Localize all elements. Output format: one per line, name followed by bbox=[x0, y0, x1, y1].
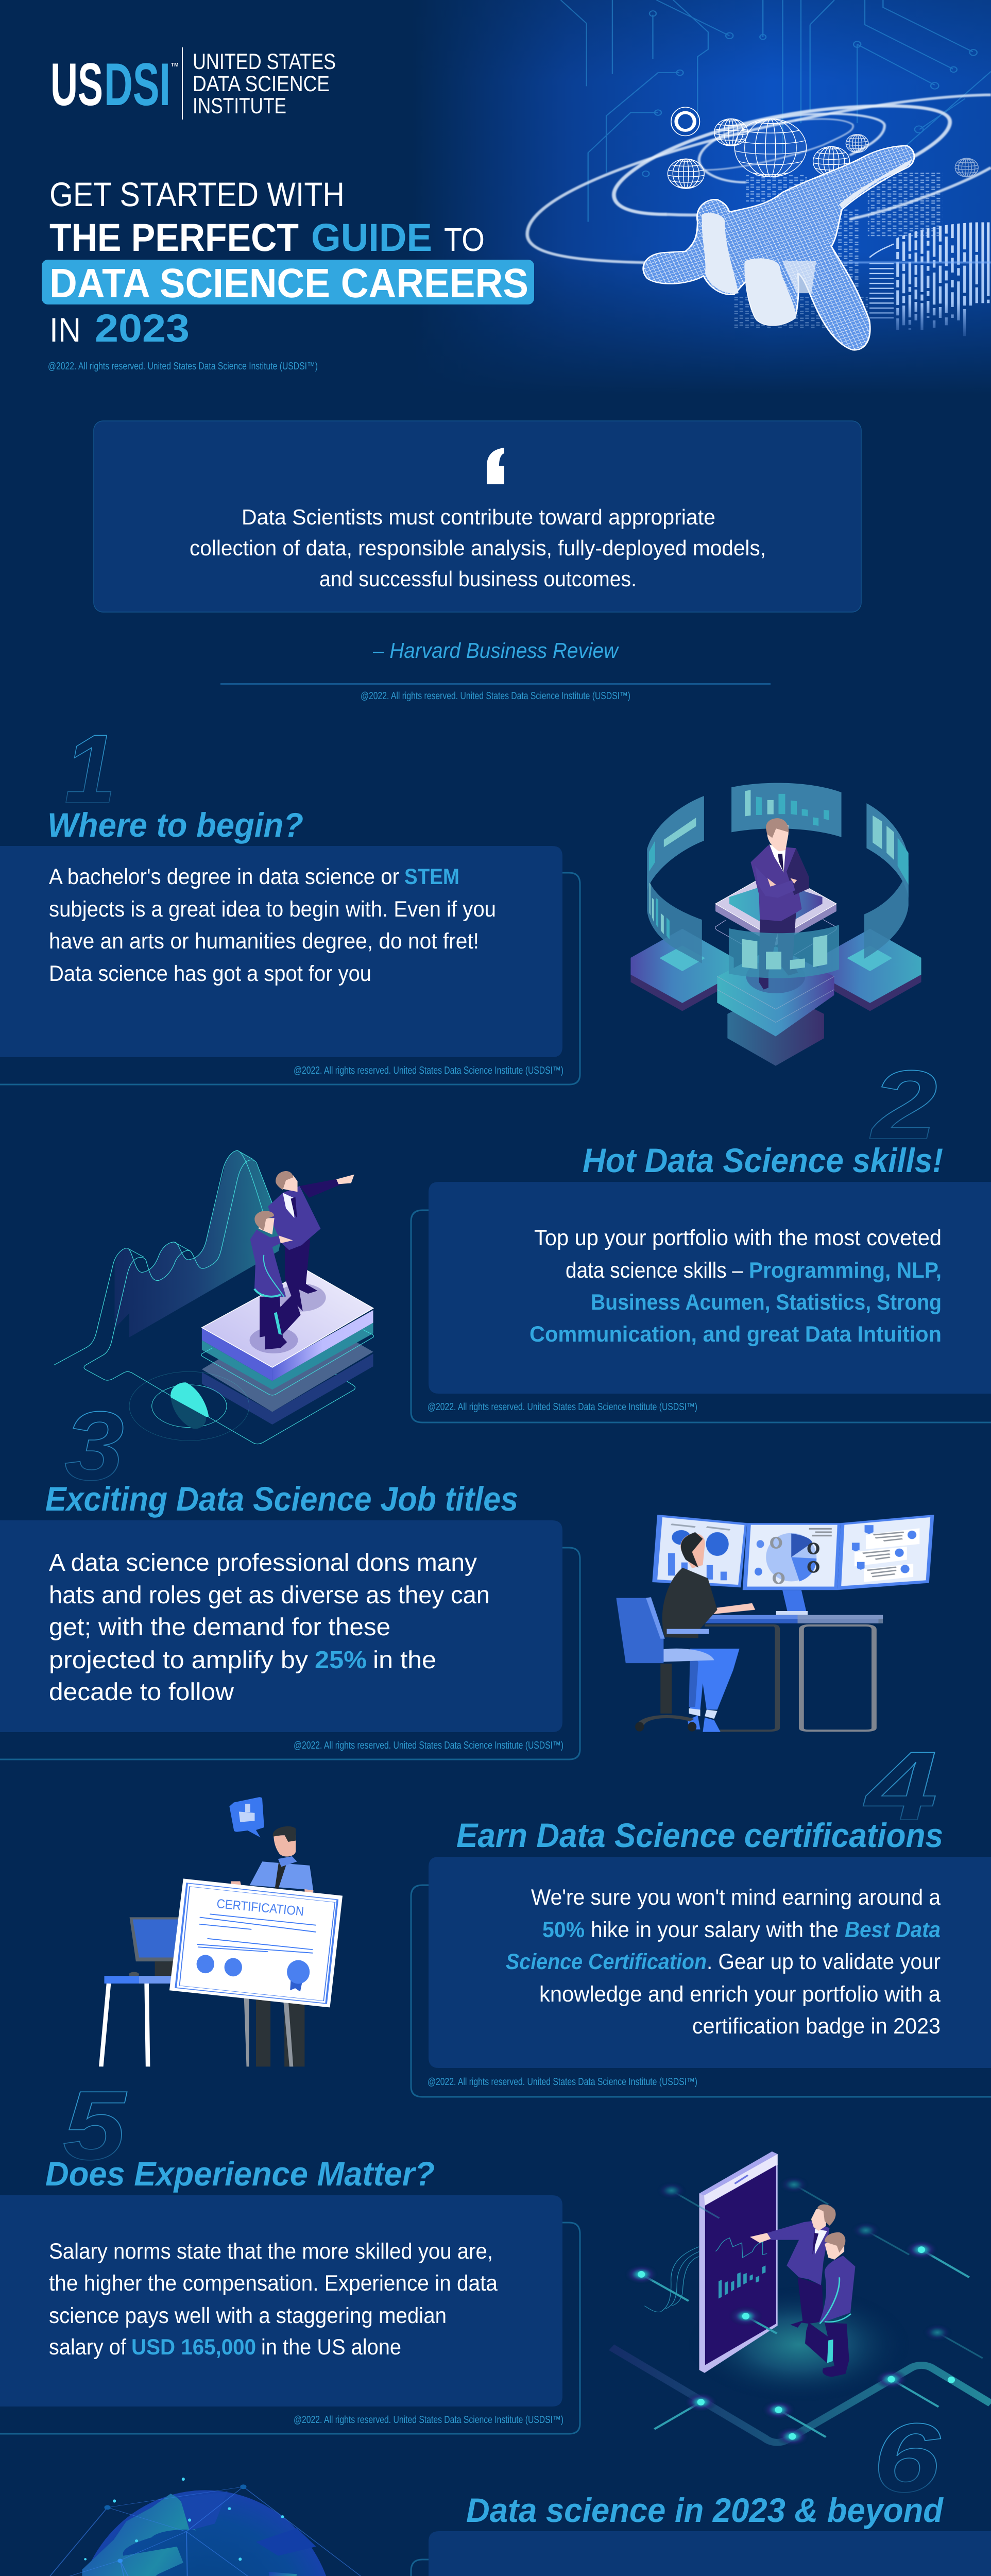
panel: certifications bbox=[411, 1857, 991, 2097]
monitor stand and desk bbox=[698, 1590, 883, 1623]
front man bbox=[250, 1211, 301, 1349]
icon: quote mark bbox=[487, 448, 504, 484]
network lines bbox=[43, 2487, 368, 2576]
radar disc bbox=[129, 1371, 249, 1440]
wire spheres bbox=[668, 119, 978, 189]
title: TO bbox=[444, 221, 485, 258]
logo wordmark: DATA SCIENCE bbox=[193, 72, 330, 96]
ring panel bars bbox=[649, 790, 909, 939]
body text: Top up your portfolio with the most coveted bbox=[534, 1226, 942, 1250]
body text: Communication, and great Data Intuition bbox=[529, 1322, 942, 1347]
illustration: man with certificate bbox=[101, 1797, 343, 2066]
title: GET STARTED WITH bbox=[49, 175, 345, 213]
tablet bbox=[699, 2151, 778, 2373]
copyright header: @2022. All rights reserved. United States Data Science Institute (USDSI™) bbox=[48, 361, 318, 372]
body text bbox=[49, 865, 496, 986]
body text: certification badge in 2023 bbox=[692, 2014, 941, 2039]
panel: quote bbox=[94, 421, 861, 612]
panel: beyond bbox=[411, 2531, 991, 2576]
body text: STEM bbox=[404, 865, 459, 889]
thumbs-up bubble bbox=[229, 1797, 264, 1837]
copyright: @2022. All rights reserved. United States Data Science Institute (USDSI™) bbox=[428, 2076, 697, 2088]
orbit rings bbox=[527, 95, 991, 263]
logo wordmark bbox=[193, 49, 336, 118]
title highlight bar bbox=[42, 260, 534, 304]
title: GUIDE bbox=[311, 216, 432, 260]
continents bbox=[82, 2492, 332, 2576]
quote text: Data Scientists must contribute toward appropriate bbox=[242, 505, 715, 529]
quote text: collection of data, responsible analysis, fully-deployed models, bbox=[190, 536, 766, 560]
body text: hats and roles get as diverse as they can bbox=[49, 1582, 490, 1609]
body text: in the US alone bbox=[261, 2335, 401, 2360]
body text: Data science has got a spot for you bbox=[49, 961, 371, 986]
number 4: 4 bbox=[863, 1732, 937, 1841]
side platforms bbox=[630, 929, 921, 1011]
number 2: 2 bbox=[869, 1050, 937, 1160]
quote text: and successful business outcomes. bbox=[319, 567, 637, 591]
number 6: 6 bbox=[873, 2403, 941, 2513]
men bbox=[750, 2205, 855, 2377]
platform layers bbox=[201, 1270, 373, 1425]
title: THE PERFECT bbox=[49, 216, 299, 260]
body text: knowledge and enrich your portfolio with a bbox=[539, 1982, 941, 2007]
certificate heading: CERTIFICATION bbox=[216, 1896, 304, 1919]
copyright: @2022. All rights reserved. United States Data Science Institute (USDSI™) bbox=[428, 1401, 697, 1413]
body text: have an arts or humanities degree, do not fret! bbox=[49, 929, 479, 954]
copyright quote: @2022. All rights reserved. United States Data Science Institute (USDSI™) bbox=[361, 690, 630, 702]
logo wordmark: UNITED STATES bbox=[193, 49, 336, 74]
wireframe hand bbox=[643, 146, 914, 350]
heading: hot skills: Hot Data Science skills! bbox=[583, 1141, 943, 1179]
body text: decade to follow bbox=[49, 1679, 234, 1706]
illustration: man on data platforms bbox=[630, 783, 921, 1066]
network nodes bbox=[40, 2484, 371, 2576]
foot shadows bbox=[250, 1283, 326, 1353]
body text: . Gear up to validate your bbox=[707, 1950, 941, 1974]
body text: data science skills – bbox=[566, 1258, 743, 1283]
panel: experience bbox=[0, 2195, 580, 2434]
body text: We're sure you won't mind earning around a bbox=[531, 1885, 941, 1910]
heading: certifications: Earn Data Science certifications bbox=[456, 1816, 943, 1854]
logo divider bbox=[182, 47, 183, 120]
body text: science pays well with a staggering median bbox=[49, 2303, 447, 2328]
body text: Science Certification bbox=[506, 1950, 707, 1974]
circuit traces bbox=[561, 0, 991, 222]
copyright: @2022. All rights reserved. United States Data Science Institute (USDSI™) bbox=[294, 2414, 563, 2426]
data building blocks bbox=[734, 173, 943, 328]
body text: hike in your salary with the bbox=[591, 1918, 839, 1942]
ring panels back bbox=[647, 783, 909, 963]
quote text bbox=[190, 505, 766, 591]
front panel bbox=[729, 925, 839, 978]
illustration: globe with network bbox=[40, 2478, 371, 2576]
title bbox=[42, 175, 534, 350]
monitor left content bbox=[668, 1524, 730, 1580]
quote attribution: – Harvard Business Review bbox=[372, 638, 619, 663]
stand platform bbox=[715, 870, 836, 955]
body text: Business Acumen, Statistics, Strong bbox=[591, 1290, 942, 1315]
heading: where to begin: Where to begin? bbox=[47, 806, 303, 844]
desk with monitor bbox=[101, 1917, 183, 2066]
body text: in the bbox=[373, 1647, 436, 1674]
body text: salary of bbox=[49, 2335, 127, 2360]
logo mark: USDSI: TM bbox=[171, 62, 178, 68]
title: IN bbox=[49, 311, 81, 349]
circular data tower bbox=[869, 222, 988, 337]
body text bbox=[506, 1885, 941, 2039]
body text bbox=[529, 1226, 942, 1347]
logo mark: USDSI bbox=[50, 50, 178, 118]
panel: job titles bbox=[0, 1520, 580, 1759]
body text: 50% bbox=[542, 1918, 585, 1942]
logo bbox=[50, 47, 336, 120]
globe bbox=[76, 2490, 335, 2576]
panel: hot skills bbox=[411, 1182, 991, 1422]
body text bbox=[49, 1549, 490, 1706]
number 1: 1 bbox=[64, 715, 116, 824]
analyst bbox=[662, 1532, 755, 1732]
wave lines bbox=[54, 1150, 355, 1444]
monitor right content bbox=[852, 1525, 919, 1582]
body text: Salary norms state that the more skilled you are, bbox=[49, 2239, 493, 2264]
logo wordmark: INSTITUTE bbox=[193, 94, 286, 118]
logo mark: USDSI: DSI bbox=[104, 50, 170, 118]
logo mark: USDSI: US bbox=[50, 50, 103, 118]
title: 2023 bbox=[95, 307, 190, 350]
wave rings behind tablet bbox=[644, 2247, 699, 2312]
number 3: 3 bbox=[64, 1392, 124, 1501]
heading: beyond: Data science in 2023 & beyond bbox=[466, 2491, 944, 2529]
star dots bbox=[66, 2478, 360, 2576]
back man bbox=[268, 1171, 354, 1311]
copyright: @2022. All rights reserved. United States Data Science Institute (USDSI™) bbox=[294, 1740, 563, 1751]
monitors bbox=[652, 1515, 934, 1590]
body text: get; with the demand for these bbox=[49, 1614, 390, 1641]
panel: where to begin bbox=[0, 846, 580, 1084]
monitor center content bbox=[755, 1529, 832, 1583]
legs bbox=[244, 1995, 304, 2066]
body text: projected to amplify by bbox=[49, 1647, 308, 1674]
body text: A bachelor's degree in data science or bbox=[49, 865, 399, 889]
desk legs bbox=[705, 1625, 874, 1731]
man bbox=[750, 818, 809, 990]
body text: A data science professional dons many bbox=[49, 1549, 477, 1577]
wave fill bbox=[114, 1150, 283, 1337]
target ring bbox=[671, 107, 699, 136]
illustration: two men at giant tablet bbox=[611, 2151, 991, 2446]
illustration: two men on platform with wave chart bbox=[54, 1150, 373, 1444]
center stack bbox=[717, 946, 834, 1066]
body text: USD 165,000 bbox=[131, 2335, 256, 2360]
heading: job titles: Exciting Data Science Job titles bbox=[45, 1480, 518, 1518]
number 5: 5 bbox=[63, 2071, 127, 2180]
body text: subjects is a great idea to begin with. Even if you bbox=[49, 897, 496, 922]
body text: Programming, NLP, bbox=[749, 1258, 942, 1283]
body text bbox=[49, 2239, 498, 2360]
illustration: analyst at three monitors bbox=[616, 1515, 934, 1732]
circuit path bbox=[611, 2347, 991, 2443]
certificate bbox=[169, 1878, 343, 2007]
man bbox=[231, 1826, 314, 1894]
chair bbox=[616, 1597, 714, 1732]
body text: Best Data bbox=[845, 1918, 941, 1942]
copyright: @2022. All rights reserved. United States Data Science Institute (USDSI™) bbox=[294, 1065, 563, 1076]
floor glow bbox=[689, 2287, 909, 2401]
body text: the higher the compensation. Experience in data bbox=[49, 2271, 498, 2296]
heading: experience: Does Experience Matter? bbox=[45, 2155, 435, 2193]
sparks bbox=[625, 2176, 983, 2446]
hero illustration: wireframe hand bbox=[412, 0, 991, 412]
title: DATA SCIENCE CAREERS bbox=[49, 260, 528, 306]
body text: 25% bbox=[315, 1647, 367, 1674]
